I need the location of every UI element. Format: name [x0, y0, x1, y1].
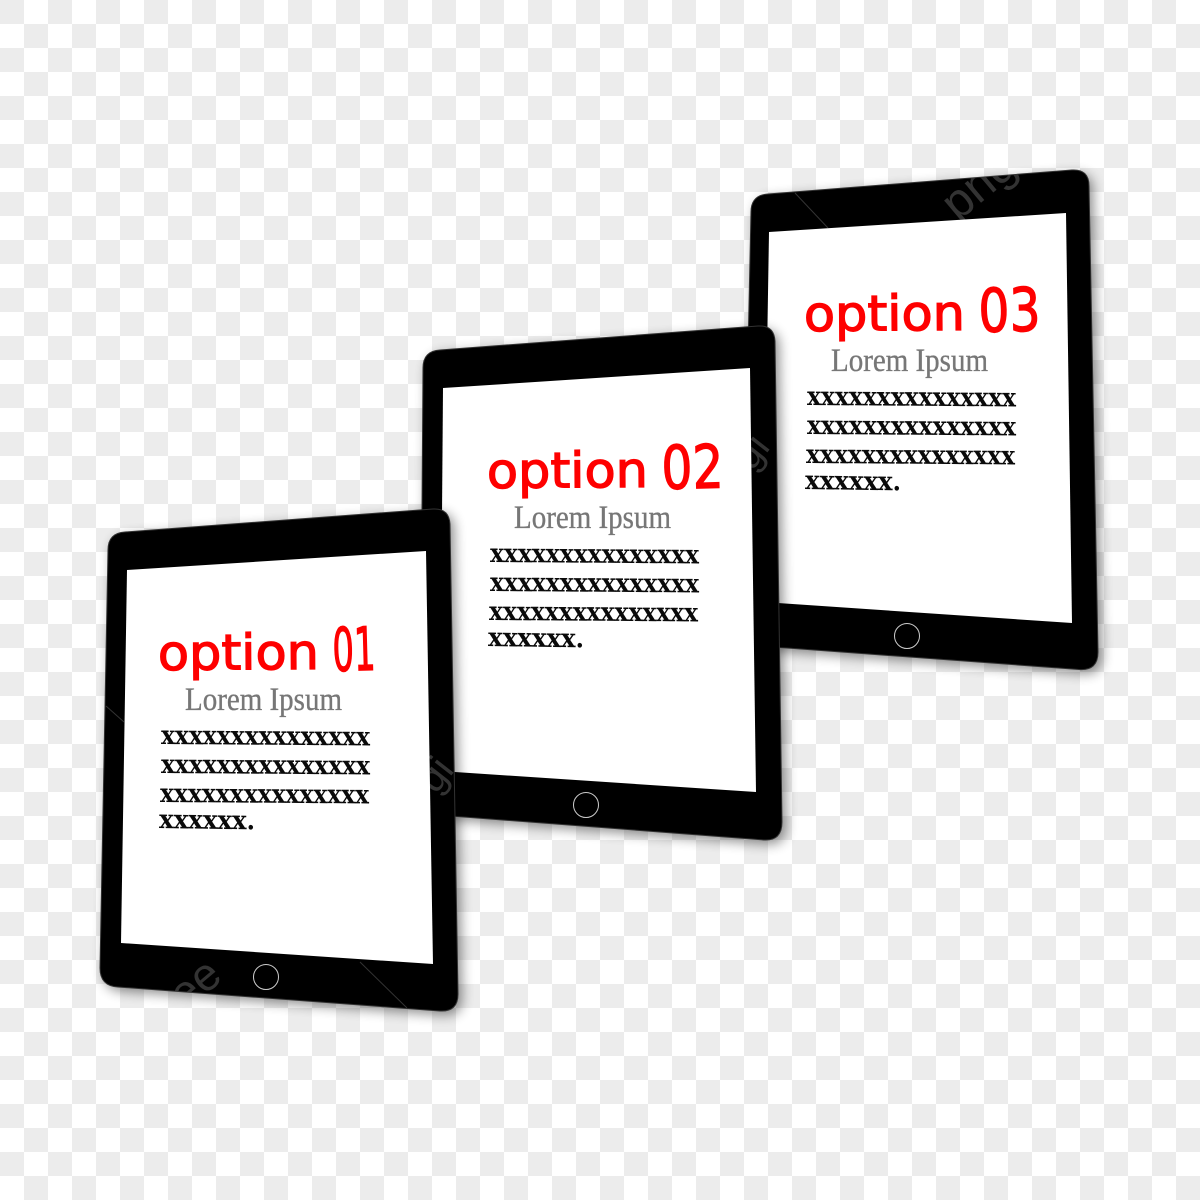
faint watermark on tablet bezels: ee [158, 947, 231, 1020]
tablet 1 body text: xxxxxxxxxxxxxxx [161, 750, 371, 781]
tablet 1 heading: option [158, 624, 319, 682]
faint watermark on tablet bezels: png [931, 138, 1026, 230]
tablet 1 body text: xxxxxx. [159, 805, 255, 836]
tablet 3 body text: xxxxxx. [805, 466, 901, 497]
tablet 3 body text: xxxxxxxxxxxxxxx [807, 382, 1017, 413]
tablet 2 heading [487, 432, 724, 504]
tablet 1 shadow [104, 513, 462, 1015]
tablet 1 body text: xxxxxxxxxxxxxxx [160, 779, 370, 810]
tablet 2 body text: xxxxxx. [488, 623, 584, 654]
tablet 3 body [742, 170, 1098, 670]
tablet 1 body text [159, 721, 371, 836]
tablet 2 screen [440, 368, 756, 792]
tablet 2 body [420, 326, 782, 840]
tablet 3 body text [805, 382, 1017, 497]
tablet 2 shadow [424, 330, 786, 844]
tablet 2 heading: 02 [661, 432, 724, 504]
tablet 3 subtitle: Lorem Ipsum [831, 343, 988, 379]
tablet 2 body text: xxxxxxxxxxxxxxx [489, 597, 699, 628]
tablet 1 [100, 509, 462, 1015]
tablet 1 screen [121, 551, 433, 964]
faint watermark on tablet bezels: gi [408, 749, 462, 801]
tablet 2 subtitle: Lorem Ipsum [514, 500, 671, 536]
tablet 2 body text: xxxxxxxxxxxxxxx [490, 539, 700, 570]
tablet 3 home button [894, 624, 920, 648]
tablet 2 body text [488, 539, 700, 654]
tablet 1 heading: 01 [332, 615, 376, 686]
tablet 1 body [100, 509, 458, 1011]
faint watermark on tablet bezels [106, 138, 1026, 1020]
tablet 2 body text: xxxxxxxxxxxxxxx [490, 568, 700, 599]
tablet 2 [420, 326, 786, 844]
tablet 1 subtitle: Lorem Ipsum [185, 682, 342, 718]
tablet 3 screen [763, 213, 1072, 623]
tablet 3 heading [804, 275, 1041, 347]
tablet 3 shadow [746, 174, 1102, 674]
faint watermark on tablet bezels: gi [724, 426, 778, 478]
tablet 2 home button [574, 792, 598, 818]
tablet 2 heading: option [487, 442, 648, 500]
tablet 1 body text: xxxxxxxxxxxxxxx [161, 721, 371, 752]
tablet 1 home button [254, 964, 278, 990]
tablet 3 [742, 170, 1102, 674]
tablet 3 body text: xxxxxxxxxxxxxxx [807, 411, 1017, 442]
tablet 1 heading [158, 615, 376, 686]
tablet 3 heading: option [804, 285, 965, 343]
tablet 3 body text: xxxxxxxxxxxxxxx [806, 440, 1016, 471]
tablet 3 heading: 03 [978, 275, 1041, 347]
